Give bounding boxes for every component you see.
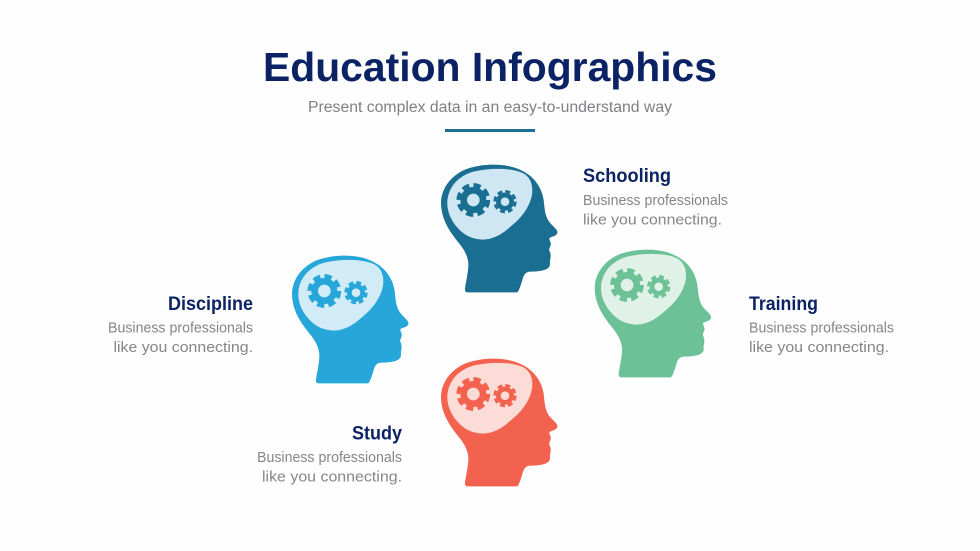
- text block: training: [749, 294, 894, 356]
- icon: study head: [441, 359, 557, 486]
- text block: discipline: like you connecting.: [114, 340, 253, 356]
- icon: training head: [595, 250, 711, 377]
- icon: schooling head: [441, 165, 557, 292]
- text block: schooling: Schooling: [583, 166, 671, 187]
- text block: study: like you connecting.: [262, 470, 402, 486]
- text block: schooling: Business professionals: [583, 193, 728, 209]
- gears: [310, 276, 366, 306]
- title: Education Infographics: [263, 44, 717, 90]
- text block: training: Business professionals: [749, 320, 894, 336]
- text block: study: [257, 424, 402, 486]
- text block: discipline: [108, 294, 253, 356]
- subtitle: Present complex data in an easy-to-understand way: [308, 99, 672, 116]
- text block: study: Study: [352, 424, 402, 444]
- text block: schooling: like you connecting.: [583, 212, 722, 228]
- icon: discipline head: [292, 256, 408, 383]
- text block: training: Training: [749, 294, 818, 315]
- gears: [612, 270, 669, 300]
- text block: training: like you connecting.: [749, 340, 889, 356]
- text block: study: Business professionals: [257, 450, 402, 466]
- gears: [459, 185, 515, 215]
- text block: discipline: Discipline: [168, 294, 253, 315]
- text block: schooling: [583, 166, 728, 228]
- title underline: [445, 129, 535, 132]
- gears: [459, 379, 515, 409]
- text block: discipline: Business professionals: [108, 320, 253, 336]
